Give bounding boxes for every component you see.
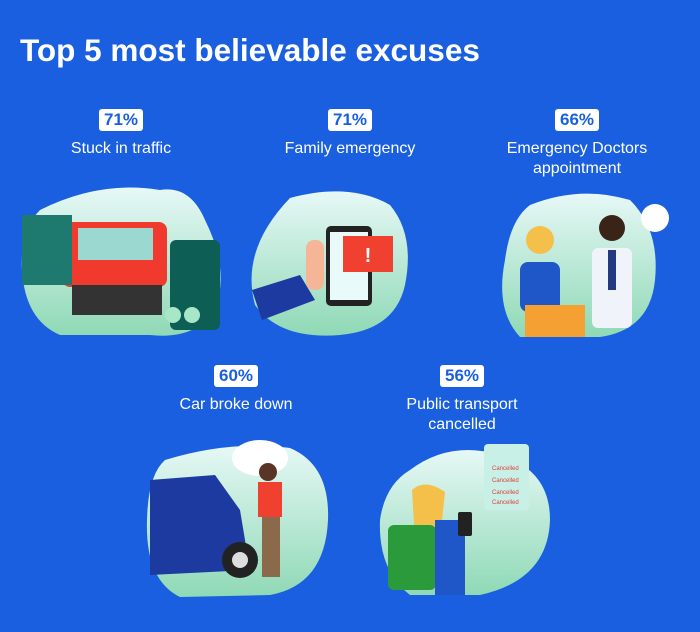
item: stuck in traffic	[71, 109, 171, 157]
item: public transport: Public transport	[406, 396, 518, 413]
item: public transport	[406, 365, 518, 433]
illustration: doctor	[502, 194, 669, 337]
illustration: car broke down	[147, 440, 328, 597]
illustration: public transport: Cancelled	[492, 478, 519, 484]
illustration: public transport: Cancelled	[492, 466, 519, 472]
item: car broke down: 60%	[219, 366, 253, 385]
item: public transport: 56%	[445, 366, 479, 385]
item: family emergency: Family emergency	[285, 140, 415, 157]
item: stuck in traffic: 71%	[104, 110, 138, 129]
illustration: public transport: Cancelled	[492, 500, 519, 506]
item: stuck in traffic: Stuck in traffic	[71, 140, 171, 157]
illustration: phone alert	[252, 191, 408, 336]
item: family emergency	[285, 109, 416, 157]
item: doctors appointment: Emergency Doctors appointment	[507, 140, 647, 177]
title: Top 5 most believable excuses	[20, 32, 480, 68]
illustration: public transport: Cancelled	[492, 490, 519, 496]
illustration: traffic	[22, 188, 221, 336]
item: doctors appointment	[507, 109, 647, 177]
item: doctors appointment: 66%	[560, 110, 594, 129]
illustration: public transport	[380, 444, 550, 595]
item: public transport: cancelled	[428, 416, 496, 433]
item: car broke down	[180, 365, 292, 413]
item: car broke down: Car broke down	[180, 396, 292, 413]
item: family emergency: 71%	[333, 110, 367, 129]
illustration: phone alert: !	[365, 245, 371, 267]
